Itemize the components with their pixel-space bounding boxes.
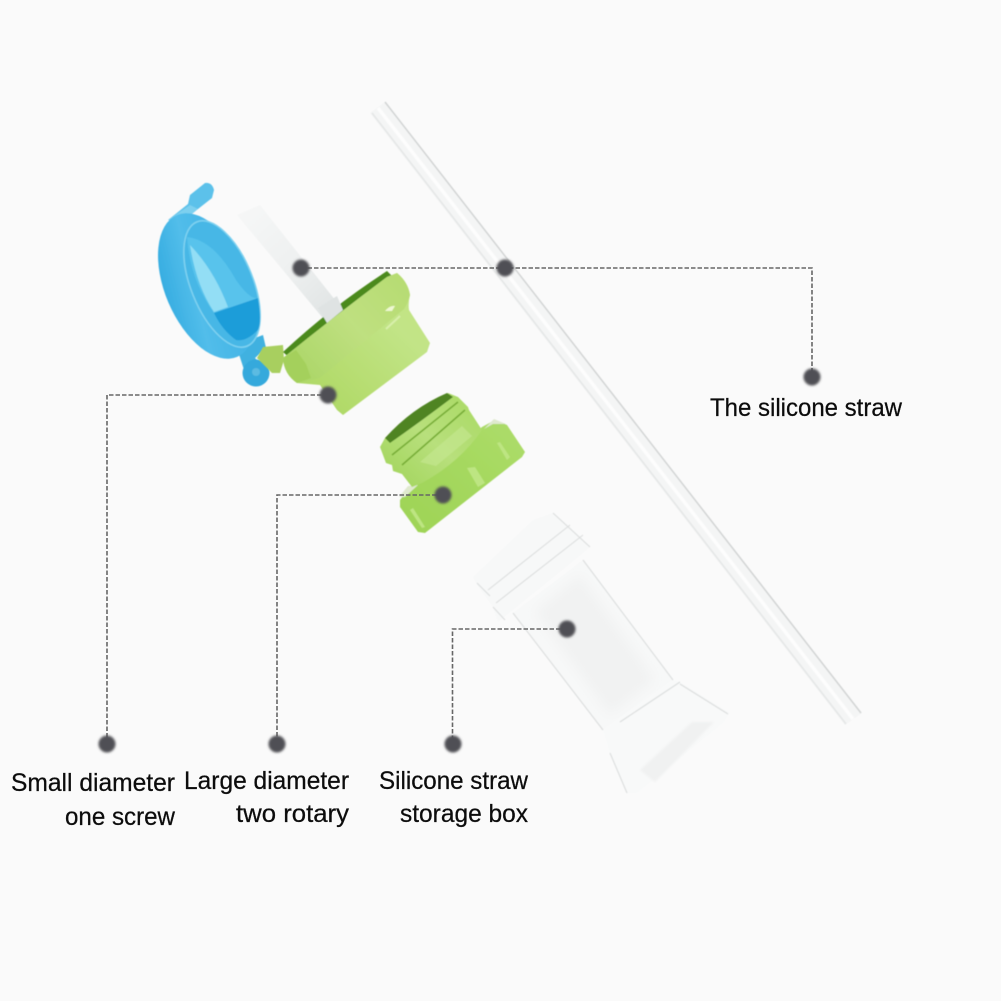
collar base ring [400, 420, 525, 533]
ring grips [467, 467, 485, 487]
box flared foot [603, 680, 730, 793]
blue flip lid [138, 183, 276, 386]
lid shell [138, 199, 276, 373]
thread lines [392, 402, 465, 465]
short straw in cap [237, 205, 343, 323]
leader line: large diameter two rotary [277, 495, 443, 744]
upper straw overlap [318, 296, 343, 323]
leader line: small diameter one screw [107, 395, 328, 744]
label: silicone straw storage box: Silicone straw [379, 767, 529, 795]
cap highlights [385, 306, 395, 311]
green upper cap [257, 271, 430, 415]
neck opening [385, 393, 453, 443]
neck highlight [420, 426, 472, 466]
hinge loop [236, 335, 270, 386]
cap inner dark rim [283, 271, 392, 362]
label: the silicone straw: The silicone straw [710, 394, 903, 422]
long silicone straw [370, 102, 862, 725]
clear storage box [473, 513, 730, 793]
label: silicone straw storage box: storage box [400, 800, 528, 828]
label: silicone straw storage box [379, 767, 529, 828]
leader line: storage box [452, 629, 567, 744]
box body [513, 560, 673, 730]
label: small diameter one screw: Small diameter [11, 769, 175, 797]
lid tab [168, 183, 214, 224]
box rim [473, 513, 590, 622]
label: large diameter two rotary [184, 767, 350, 828]
lid window [187, 237, 258, 313]
collar neck [380, 393, 482, 487]
cap flange [283, 273, 410, 383]
cap body [283, 273, 430, 415]
box edge lines [477, 513, 728, 793]
label: small diameter one screw: one screw [65, 803, 176, 831]
ring light edge [399, 485, 418, 497]
cap hinge [257, 345, 284, 373]
label: small diameter one screw [11, 769, 176, 831]
cap left shadow [283, 350, 311, 383]
foot inner shade [640, 722, 714, 782]
label: large diameter two rotary: Large diameter [184, 767, 349, 795]
leader line: the silicone straw [301, 268, 812, 377]
marker dots [98, 260, 820, 752]
green lower threaded collar [380, 393, 525, 533]
label: large diameter two rotary: two rotary [236, 800, 350, 828]
lid inner [168, 210, 276, 358]
box body inner shade [535, 575, 655, 715]
